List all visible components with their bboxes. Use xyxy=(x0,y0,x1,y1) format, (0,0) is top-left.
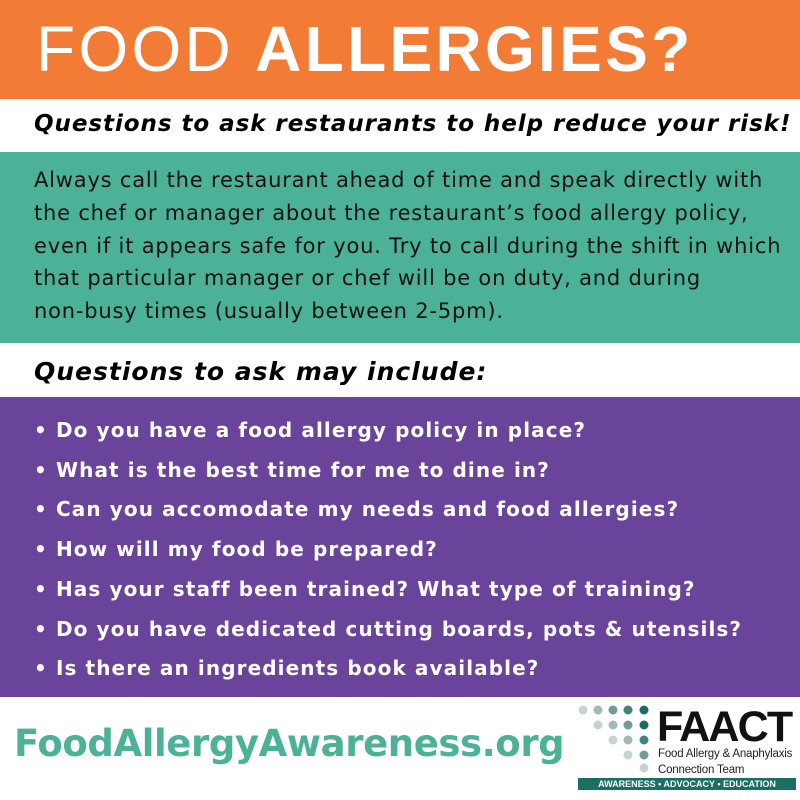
panel: questions list: • What is the best time for me to dine in? xyxy=(34,458,550,482)
advice text: even if it appears safe for you. Try to call during the shift in which xyxy=(34,234,781,258)
panel: advice xyxy=(0,152,800,343)
logo wordmark: FAACT xyxy=(657,703,791,751)
subtitle: Questions to ask restaurants to help reduce your risk! xyxy=(34,111,791,137)
panel: questions list: • Can you accomodate my needs and food allergies? xyxy=(34,497,679,521)
logo tagline: Connection Team xyxy=(658,764,744,776)
header band xyxy=(0,0,800,99)
logo banner xyxy=(578,778,796,790)
panel: questions list xyxy=(0,397,800,697)
panel: questions list: • Do you have dedicated cutting boards, pots & utensils? xyxy=(34,617,742,641)
logo tagline: Food Allergy & Anaphylaxis xyxy=(658,748,792,760)
logo banner: AWARENESS • ADVOCACY • EDUCATION xyxy=(598,779,776,789)
advice text: Always call the restaurant ahead of time and speak directly with xyxy=(34,168,763,192)
panel: questions list: • How will my food be prepared? xyxy=(34,537,438,561)
advice text: non-busy times (usually between 2-5pm). xyxy=(34,299,504,323)
logo tagline xyxy=(658,748,792,776)
panel: questions list: • Has your staff been trained? What type of training? xyxy=(34,577,696,601)
advice text xyxy=(34,168,781,323)
panel: questions list: • Is there an ingredients book available? xyxy=(34,656,539,680)
advice text: the chef or manager about the restaurant’s food allergy policy, xyxy=(34,201,749,225)
panel: questions list: • Do you have a food allergy policy in place? xyxy=(34,418,586,442)
title: FOOD ALLERGIES? xyxy=(36,13,694,85)
website url: FoodAllergyAwareness.org xyxy=(14,722,564,765)
questions heading: Questions to ask may include: xyxy=(34,357,487,386)
logo: FAACT xyxy=(578,703,796,790)
icon: dot grid xyxy=(578,706,648,772)
advice text: that particular manager or chef will be on duty, and during xyxy=(34,266,701,290)
